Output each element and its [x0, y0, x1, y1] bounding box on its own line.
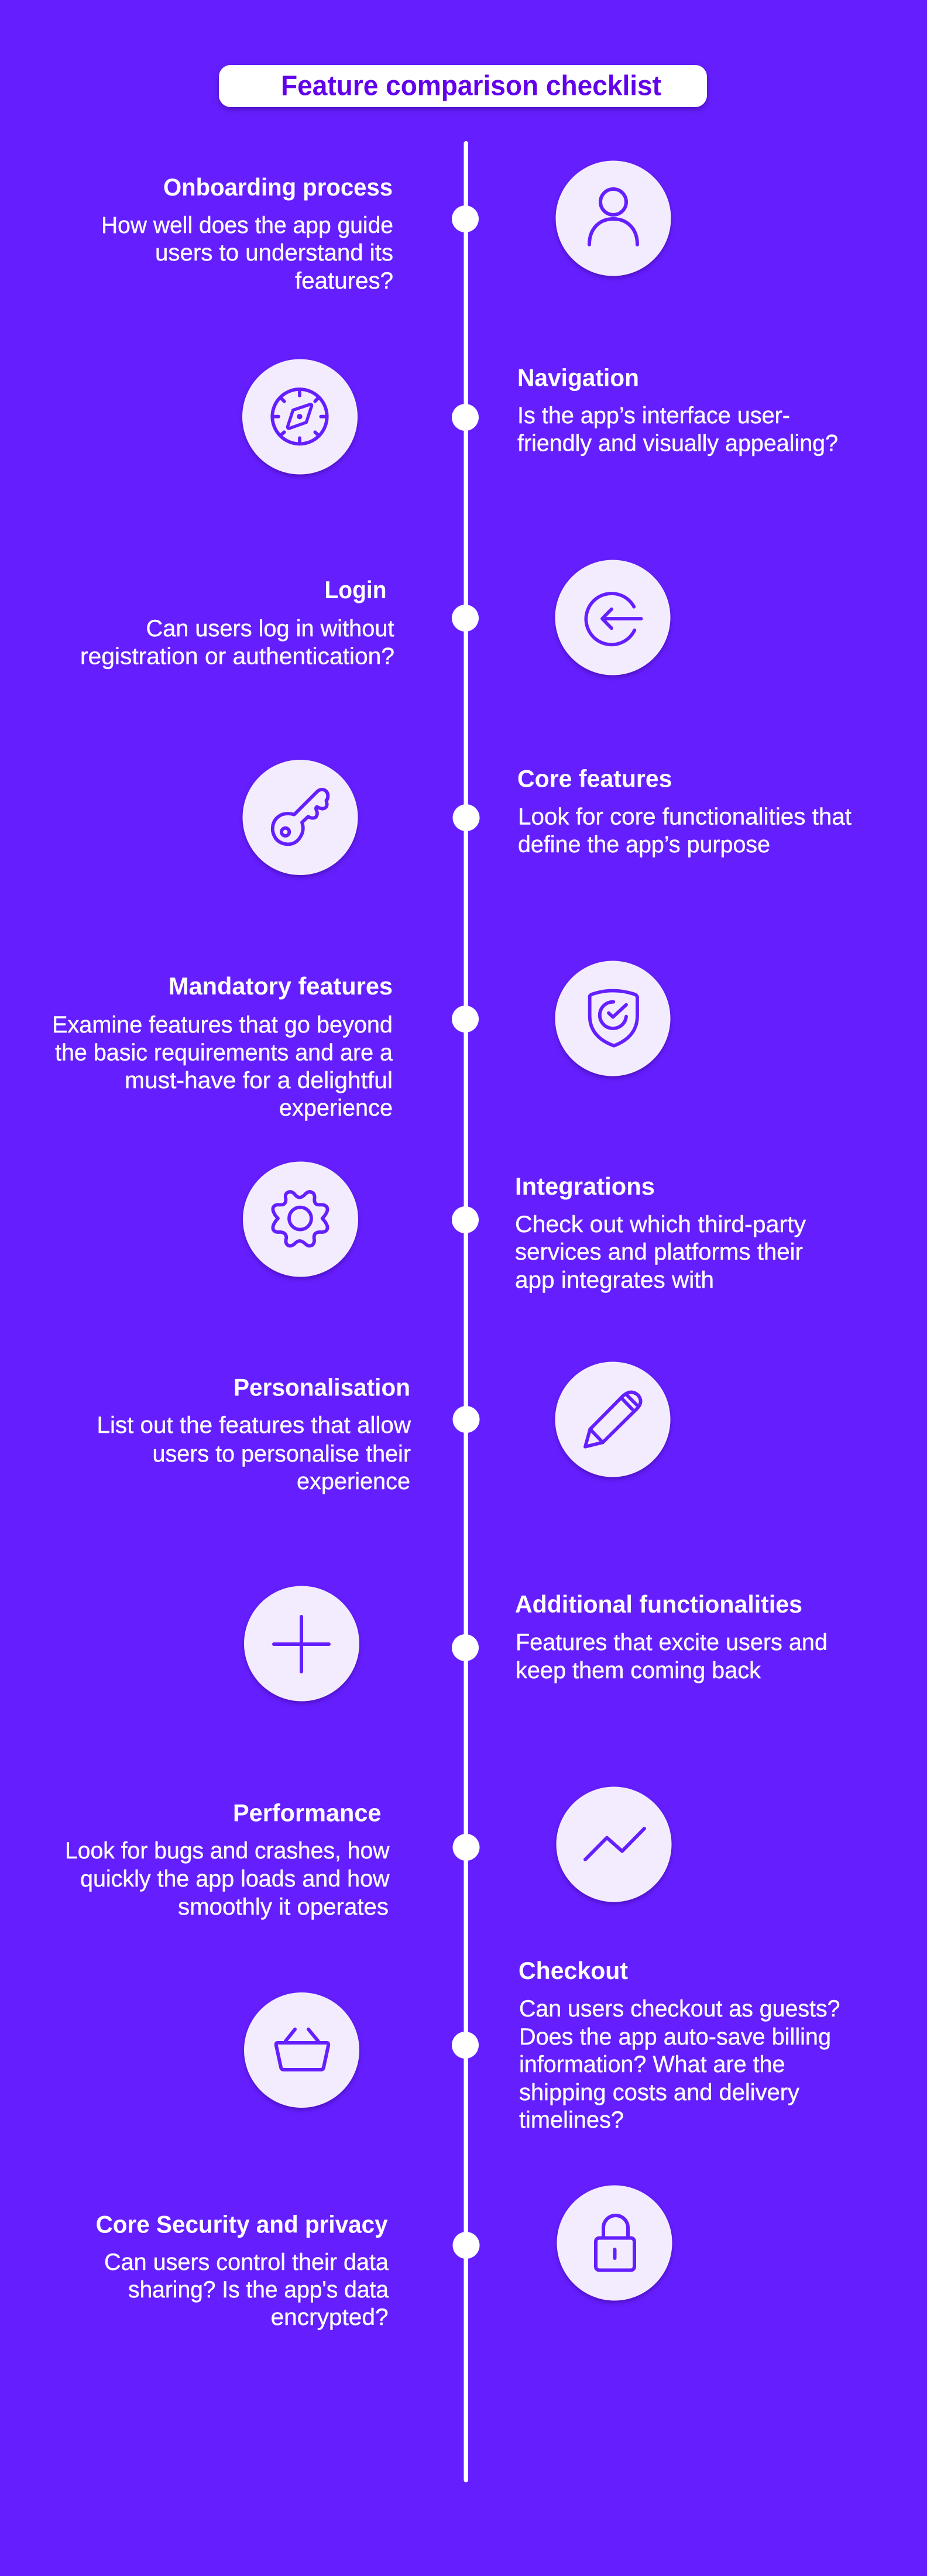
text block: Core features description [518, 804, 852, 857]
heading: Mandatory features: Mandatory features [169, 972, 393, 1000]
timeline dot [452, 1634, 479, 1661]
text block: Checkout description: information? What are the [519, 2052, 785, 2077]
text block: Mandatory features description: the basic requirements and are a [55, 1040, 393, 1065]
timeline dot [453, 1834, 480, 1861]
panel: Performance [65, 1786, 672, 1920]
heading: Core Security and privacy: Core Security and privacy [96, 2211, 388, 2238]
timeline dot [452, 404, 479, 431]
text block: Integrations description: services and platforms their [515, 1239, 803, 1265]
text block: Login description: Can users log in without [146, 616, 394, 642]
text block: Checkout description: timelines? [519, 2107, 624, 2133]
text block: Navigation description: friendly and visually appealing? [517, 431, 838, 457]
timeline dot [453, 2232, 480, 2259]
text block: Checkout description: shipping costs and delivery [519, 2080, 799, 2105]
icon: padlock [557, 2186, 672, 2300]
panel: Personalisation [97, 1361, 671, 1494]
text block: Navigation description: Is the app’s interface user- [517, 403, 790, 428]
timeline line [464, 141, 468, 2482]
heading: Navigation: Navigation [517, 364, 639, 391]
text block: Mandatory features description: Examine features that go beyond [52, 1012, 393, 1038]
text block: Core Security description: sharing? Is the app's data [128, 2277, 389, 2303]
title: Feature comparison checklist [281, 71, 661, 102]
timeline dot [452, 1006, 479, 1033]
text block: Onboarding description: users to understand its [155, 240, 393, 266]
icon: pencil [555, 1361, 671, 1477]
panel: Core features [242, 760, 852, 875]
text block: Integrations description: Check out which third-party [515, 1212, 806, 1237]
panel: Navigation [242, 359, 838, 474]
panel: Core Security and privacy [96, 2186, 672, 2330]
timeline dot [452, 2032, 479, 2059]
heading: Checkout: Checkout [519, 1957, 628, 1984]
text block: Performance description: smoothly it operates [178, 1894, 389, 1920]
panel: Checkout [244, 1957, 840, 2133]
heading: Additional functionalities: Additional functionalities [515, 1590, 802, 1618]
text block: Login description [80, 616, 394, 670]
text block: Core features description: define the app’s purpose [518, 832, 770, 857]
timeline dot [453, 804, 480, 831]
icon: user [556, 160, 671, 276]
icon: compass [242, 359, 358, 474]
text block: Checkout description: Does the app auto-save billing [519, 2024, 831, 2050]
text block: Core Security description: encrypted? [271, 2304, 389, 2330]
icon: shopping basket [244, 1992, 359, 2108]
text block: Checkout description [519, 1996, 840, 2133]
text block: Onboarding description [101, 212, 393, 294]
timeline dot [452, 605, 479, 632]
text block: Integrations description [515, 1212, 806, 1293]
text block: Personalisation description [97, 1412, 411, 1494]
icon: trend line [556, 1786, 672, 1902]
timeline dot [452, 1206, 479, 1233]
heading: Core features: Core features [517, 765, 672, 793]
timeline dot [453, 1406, 480, 1433]
text block: Onboarding description: features? [295, 268, 393, 294]
text block: Additional functionalities description: Features that excite users and [516, 1630, 828, 1655]
icon: gear [243, 1161, 358, 1277]
text block: Core Security description: Can users control their data [104, 2249, 389, 2275]
text block: Checkout description: Can users checkout as guests? [519, 1996, 840, 2022]
text block: Mandatory features description: experience [279, 1095, 393, 1121]
icon: plus [244, 1586, 359, 1701]
text block: Login description: registration or authentication? [80, 644, 394, 670]
timeline dot [452, 205, 479, 232]
text block: Personalisation description: users to personalise their [152, 1441, 411, 1467]
text block: Performance description: Look for bugs and crashes, how [65, 1838, 390, 1864]
text block: Performance description: quickly the app loads and how [80, 1866, 390, 1892]
text block: Navigation description [517, 403, 838, 457]
text block: Mandatory features description [52, 1012, 393, 1121]
panel: Integrations [243, 1161, 806, 1293]
text block: Onboarding description: How well does the app guide [101, 212, 393, 238]
text block: Personalisation description: experience [297, 1469, 410, 1494]
heading: Login: Login [324, 576, 386, 603]
text block: Mandatory features description: must-have for a delightful [125, 1068, 393, 1093]
icon: key [242, 760, 358, 875]
text block: Integrations description: app integrates with [515, 1267, 714, 1293]
icon: shield check [555, 961, 671, 1076]
text block: Performance description [65, 1838, 390, 1920]
panel: Additional functionalities [244, 1586, 828, 1701]
panel: Mandatory features [52, 961, 671, 1121]
heading: Performance: Performance [233, 1799, 382, 1826]
text block: Additional functionalities description: keep them coming back [516, 1658, 761, 1683]
heading: Onboarding process: Onboarding process [163, 173, 393, 201]
text block: Core Security description [104, 2249, 389, 2330]
icon: login arrow [555, 560, 671, 675]
text block: Core features description: Look for core functionalities that [518, 804, 852, 830]
panel: Onboarding process [101, 160, 671, 294]
text block: Personalisation description: List out the features that allow [97, 1412, 411, 1438]
text block: Additional functionalities description [516, 1630, 828, 1683]
title [219, 65, 707, 107]
panel: Login [80, 560, 671, 675]
heading: Personalisation: Personalisation [234, 1373, 410, 1401]
heading: Integrations: Integrations [515, 1172, 655, 1200]
